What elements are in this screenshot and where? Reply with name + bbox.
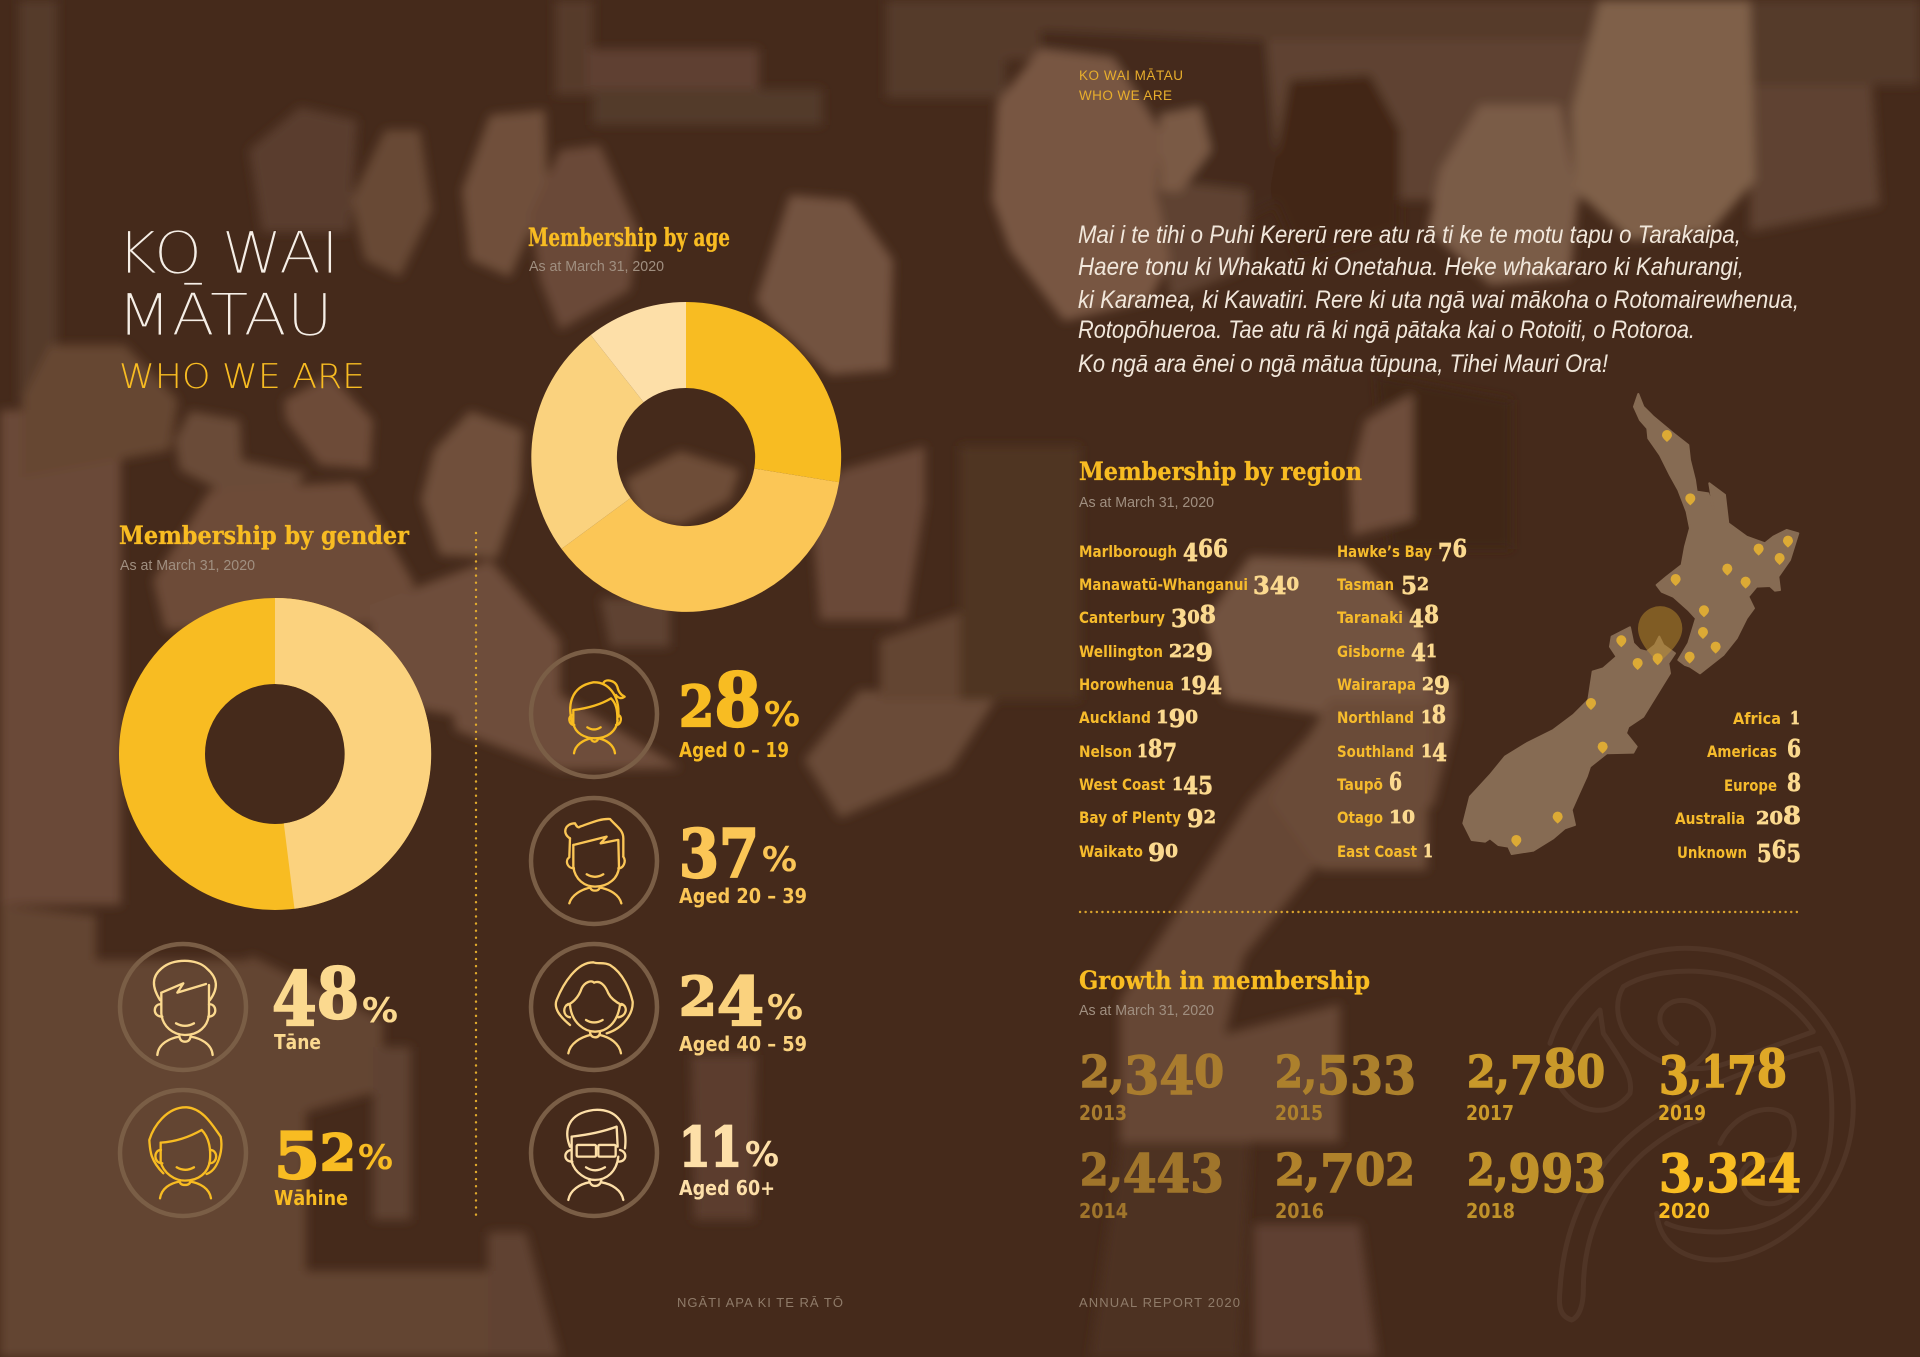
list: regions column 2: 48: [1409, 600, 1439, 633]
stat: 24% aged 40–59: 24: [679, 963, 764, 1041]
list: regions column 1: Marlborough: [1079, 542, 1177, 561]
list: overseas: Americas: [1707, 742, 1777, 761]
stat: 11% aged 60+: 11: [679, 1115, 742, 1179]
stat: 48% tāne: Tāne: [274, 1030, 321, 1054]
list: regions column 2: 76: [1438, 534, 1467, 567]
stat: 48% tāne: 48: [272, 952, 359, 1043]
list: regions column 1: Bay of Plenty: [1079, 808, 1181, 827]
map: New Zealand with pins: [1463, 394, 1798, 854]
list: overseas: 1: [1790, 708, 1800, 729]
heading: membership by age: Membership by age: [528, 223, 730, 252]
list: regions column 1: West Coast: [1079, 775, 1165, 794]
stat: 2013: 2,340: [1080, 1046, 1224, 1107]
list: regions column 1: Canterbury: [1079, 608, 1165, 627]
footer: left page: NGĀTI APA KI TE RĀ TŌ: [677, 1295, 843, 1310]
script text: tauparapara: [1078, 221, 1799, 378]
stat: 2014: 2014: [1079, 1199, 1128, 1223]
script text: tauparapara: Mai i te tihi o Puhi Kererū rere atu rā ti ke te motu tapu o Tarakaipa,: [1078, 221, 1741, 249]
stat: 2016: 2,702: [1275, 1144, 1415, 1205]
back wall: [19, 0, 57, 400]
list: regions column 1: [1079, 534, 1299, 867]
list: regions column 1: 466: [1183, 534, 1228, 567]
list: overseas: 8: [1787, 768, 1801, 797]
table and floor: [0, 410, 121, 905]
front singer: [1750, 85, 1880, 232]
icon: child: [531, 651, 657, 777]
stat: 37% aged 20–39: [679, 815, 807, 908]
list: regions column 1: Horowhenua: [1079, 675, 1174, 694]
title: Ko Wai Mātau: KO WAI: [117, 219, 339, 287]
heading: membership by gender: Membership by gender: [119, 521, 410, 550]
stat: 48% tāne: [272, 952, 398, 1054]
footer: right page: ANNUAL REPORT 2020: [1079, 1295, 1240, 1310]
list: regions column 2: Northland: [1337, 708, 1414, 727]
list: regions column 2: Gisborne: [1337, 642, 1405, 661]
list: overseas: Europe: [1724, 776, 1777, 795]
icon: young adult: [531, 798, 657, 924]
stat: 2020: 3,324: [1659, 1144, 1801, 1205]
script text: tauparapara: ki Karamea, ki Kawatiri. Rere ki uta ngā wai mākoha o Rotomairewhenua,: [1078, 286, 1799, 314]
running header: [1079, 68, 1183, 103]
list: overseas: Unknown: [1677, 843, 1747, 862]
stat: 11% aged 60+: [679, 1115, 779, 1200]
panel: membership by region: [1079, 394, 1801, 868]
list: regions column 1: 190: [1156, 704, 1198, 733]
stat: 2017: 2,780: [1467, 1039, 1605, 1107]
list: regions column 2: 41: [1411, 638, 1437, 667]
elder face: [1428, 105, 1578, 285]
stat: 11% aged 60+: %: [745, 1135, 779, 1175]
icon: woman: [120, 1090, 246, 1216]
stat: 2018: 2018: [1466, 1199, 1515, 1223]
list: regions column 1: Manawatū-Whanganui: [1079, 575, 1248, 594]
heading: membership by region: Membership by region: [1079, 457, 1362, 486]
list: regions column 2: Otago: [1337, 808, 1383, 827]
stat: 52% wāhine: [274, 1119, 393, 1210]
list: overseas: Africa: [1733, 709, 1781, 728]
stat: 24% aged 40–59: %: [767, 988, 803, 1028]
panel: growth in membership: [1079, 966, 1801, 1223]
list: regions column 1: 92: [1187, 804, 1216, 833]
stat: 2015: 2,533: [1275, 1046, 1416, 1107]
stat: 11% aged 60+: Aged 60+: [679, 1176, 775, 1200]
stat: 52% wāhine: Wāhine: [274, 1186, 348, 1210]
list: regions column 2: Hawke’s Bay: [1337, 542, 1432, 561]
stat: 52% wāhine: %: [358, 1138, 393, 1178]
list: regions column 2: 29: [1422, 671, 1450, 700]
list: regions column 2: 6: [1389, 767, 1402, 796]
script text: tauparapara: Rotopōhueroa. Tae atu rā ki ngā pātaka kai o Rotoiti, o Rotoroa.: [1078, 316, 1695, 344]
child: [1376, 375, 1511, 549]
stat: 2020: 2020: [1658, 1199, 1710, 1223]
stat: 52% wāhine: 52: [274, 1119, 356, 1194]
region pins: [1511, 430, 1793, 847]
list: regions column 1: 308: [1171, 600, 1216, 633]
icon: man: [120, 944, 246, 1070]
list: regions column 1: Wellington: [1079, 642, 1163, 661]
main title: [117, 219, 365, 397]
singer faces left: [249, 107, 357, 232]
divider dots: [1080, 911, 1801, 913]
list: regions column 2: 10: [1389, 807, 1415, 828]
panel: membership by age: [528, 223, 841, 1216]
stat: 2013: 2013: [1079, 1101, 1127, 1125]
stat: 28% aged 0–19: %: [764, 695, 800, 735]
list: overseas: 6: [1787, 734, 1801, 763]
icon: middle aged woman: [531, 944, 657, 1070]
stat: 2019: 3,178: [1659, 1039, 1787, 1107]
divider dots: [475, 533, 477, 1218]
list: overseas: [1675, 708, 1801, 868]
highlight pin: Nelson: [1638, 606, 1682, 663]
stat: 2015: 2015: [1275, 1101, 1323, 1125]
icon: older man: [531, 1090, 657, 1216]
stat: 2017: 2017: [1466, 1101, 1514, 1125]
list: regions column 1: 229: [1169, 638, 1213, 667]
running header: KO WAI MĀTAU: [1079, 68, 1183, 83]
heading: growth in membership: Growth in membership: [1079, 966, 1370, 995]
list: regions column 2: 52: [1401, 571, 1429, 600]
list: regions column 2: Southland: [1337, 742, 1414, 761]
rear singer hair: [1270, 75, 1400, 260]
list: regions column 2: Wairarapa: [1337, 675, 1416, 694]
script text: tauparapara: Ko ngā ara ēnei o ngā mātua tūpuna, Tihei Mauri Ora!: [1078, 350, 1608, 378]
stat: 37% aged 20–39: %: [762, 840, 797, 880]
list: regions column 2: Taranaki: [1337, 608, 1403, 627]
stat: 2018: 2,993: [1467, 1144, 1606, 1205]
stat: 48% tāne: %: [362, 991, 398, 1031]
list: regions column 1: Auckland: [1079, 708, 1151, 727]
stat: 37% aged 20–39: 37: [679, 815, 759, 893]
list: overseas: 565: [1757, 835, 1801, 868]
list: overseas: Australia: [1675, 809, 1745, 828]
list: regions column 2: 18: [1421, 700, 1446, 729]
stat: 28% aged 0–19: 28: [679, 658, 761, 744]
list: regions column 2: 1: [1423, 841, 1433, 862]
main singer: [1040, 30, 1280, 260]
script text: tauparapara: Haere tonu ki Whakatū ki Onetahua. Heke whakararo ki Kahurangi,: [1078, 253, 1744, 281]
date note: As at March 31, 2020: [1079, 1002, 1214, 1019]
list: regions column 1: 340: [1253, 571, 1299, 600]
stat: 24% aged 40–59: [679, 963, 807, 1056]
donut chart: age: [531, 302, 841, 612]
date note: As at March 31, 2020: [1079, 494, 1214, 511]
panel: membership by gender: [119, 521, 431, 1216]
list: overseas: 208: [1756, 801, 1801, 830]
list: regions column 2: East Coast: [1337, 842, 1417, 861]
stat: 28% aged 0–19: Aged 0 – 19: [679, 738, 789, 762]
stat: 2014: 2,443: [1080, 1144, 1224, 1205]
list: regions column 2: [1337, 534, 1467, 862]
stat: 37% aged 20–39: Aged 20 – 39: [679, 884, 807, 908]
list: regions column 1: Nelson: [1079, 742, 1132, 761]
map: islands: [1463, 394, 1798, 854]
stat: 2019: 2019: [1658, 1101, 1706, 1125]
date note: As at March 31, 2020: [529, 258, 664, 275]
fists and arms left: [22, 345, 178, 478]
list: regions column 2: Tasman: [1337, 575, 1394, 594]
koru watermark: [1550, 948, 1853, 1320]
list: regions column 1: 194: [1180, 671, 1222, 700]
list: regions column 1: Waikato: [1079, 842, 1143, 861]
subtitle: Who we are: WHO WE ARE: [119, 357, 365, 397]
list: regions column 2: 14: [1421, 738, 1447, 767]
list: regions column 2: Taupō: [1337, 775, 1383, 794]
running header: WHO WE ARE: [1079, 88, 1172, 103]
title: Ko Wai Mātau: MĀTAU: [117, 281, 333, 349]
donut chart: gender: [162, 598, 431, 909]
title: Ko Wai Mātau: [117, 219, 339, 349]
list: regions column 1: 90: [1148, 838, 1178, 867]
date note: As at March 31, 2020: [120, 557, 255, 574]
stat: 28% aged 0–19: [679, 658, 800, 762]
right side body: [960, 446, 1080, 700]
stat: 24% aged 40–59: Aged 40 – 59: [679, 1032, 807, 1056]
stat: 2016: 2016: [1275, 1199, 1324, 1223]
list: regions column 1: 187: [1137, 734, 1177, 767]
list: regions column 1: 145: [1172, 771, 1213, 800]
